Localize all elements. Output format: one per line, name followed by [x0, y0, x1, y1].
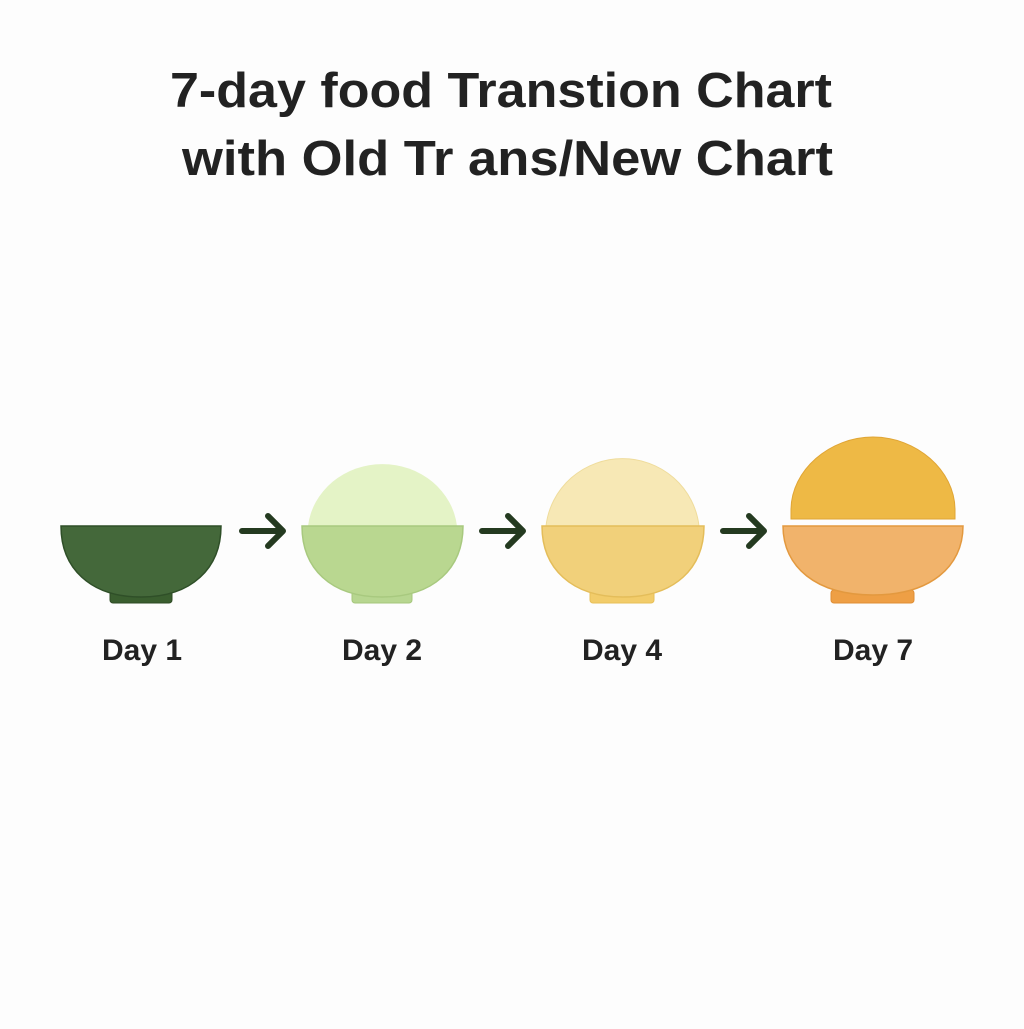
- day labels: Day 4: [582, 634, 662, 667]
- title: 7-day food Transtion Chart: [170, 64, 832, 118]
- day labels: Day 7: [833, 634, 913, 667]
- arrow 3: [723, 516, 764, 546]
- arrow 2: [482, 516, 523, 546]
- bowl: Day 1: [61, 526, 221, 603]
- day labels: Day 1: [102, 634, 182, 667]
- title: [170, 64, 833, 186]
- title: with Old Tr ans/New Chart: [181, 132, 833, 186]
- bowl: Day 2: [302, 464, 463, 603]
- bowl: Day 4: [542, 459, 704, 603]
- arrow 1: [242, 516, 283, 546]
- day labels: Day 2: [342, 634, 422, 667]
- bowl: Day 7: [783, 437, 963, 603]
- day labels: [102, 634, 913, 667]
